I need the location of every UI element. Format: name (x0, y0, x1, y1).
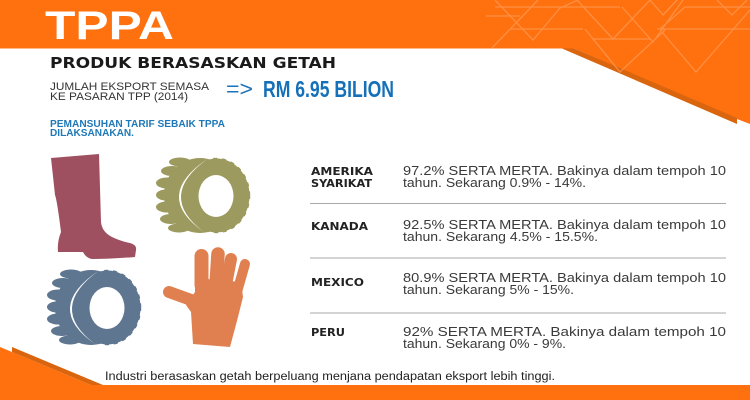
export label: JUMLAH EKSPORT SEMASA (50, 81, 210, 93)
icon: boot (51, 154, 136, 259)
row: Peru: tahun. Sekarang 0% - 9%. (403, 336, 566, 351)
footer note: Industri berasaskan getah berpeluang menjana pendapatan eksport lebih tinggi. (105, 371, 555, 383)
row: Peru: PERU (311, 327, 345, 339)
row: Peru: 92% SERTA MERTA. Bakinya dalam tempoh 10 (403, 324, 726, 339)
arrow: => (226, 78, 253, 101)
header banner (0, 0, 750, 124)
tariff note: PEMANSUHAN TARIF SEBAIK TPPA (50, 119, 225, 130)
row: Kanada: tahun. Sekarang 4.5% - 15.5%. (403, 229, 598, 244)
row: Mexico: MEXICO (311, 277, 364, 289)
row: Mexico: tahun. Sekarang 5% - 15%. (403, 282, 574, 297)
tariff note (50, 119, 225, 139)
tariff note: DILAKSANAKAN. (50, 128, 134, 139)
row: Amerika Syarikat: SYARIKAT (311, 178, 373, 190)
export value: RM 6.95 BILION (263, 76, 394, 102)
export label (50, 81, 210, 103)
row: Amerika Syarikat: AMERIKA (311, 166, 374, 178)
country table (310, 163, 726, 351)
export label: KE PASARAN TPP (2014) (50, 91, 188, 103)
footer banner (0, 347, 750, 400)
icon: blue tire (47, 270, 140, 345)
icon: olive tire (156, 158, 250, 233)
icon: glove (169, 254, 245, 347)
row: Amerika Syarikat (311, 163, 726, 190)
row: Kanada: 92.5% SERTA MERTA. Bakinya dalam tempoh 10 (403, 217, 726, 232)
row: Peru (311, 324, 726, 351)
row: Kanada: KANADA (311, 221, 369, 233)
heading: PRODUK BERASASKAN GETAH (50, 54, 336, 72)
row: Mexico: 80.9% SERTA MERTA. Bakinya dalam tempoh 10 (403, 270, 726, 285)
row: Amerika Syarikat: 97.2% SERTA MERTA. Bakinya dalam tempoh 10 (403, 163, 726, 178)
title: TPPA (45, 4, 174, 48)
row: Amerika Syarikat: tahun. Sekarang 0.9% - 14%. (403, 175, 586, 190)
row: Kanada (311, 217, 726, 244)
row: Mexico (311, 270, 726, 297)
